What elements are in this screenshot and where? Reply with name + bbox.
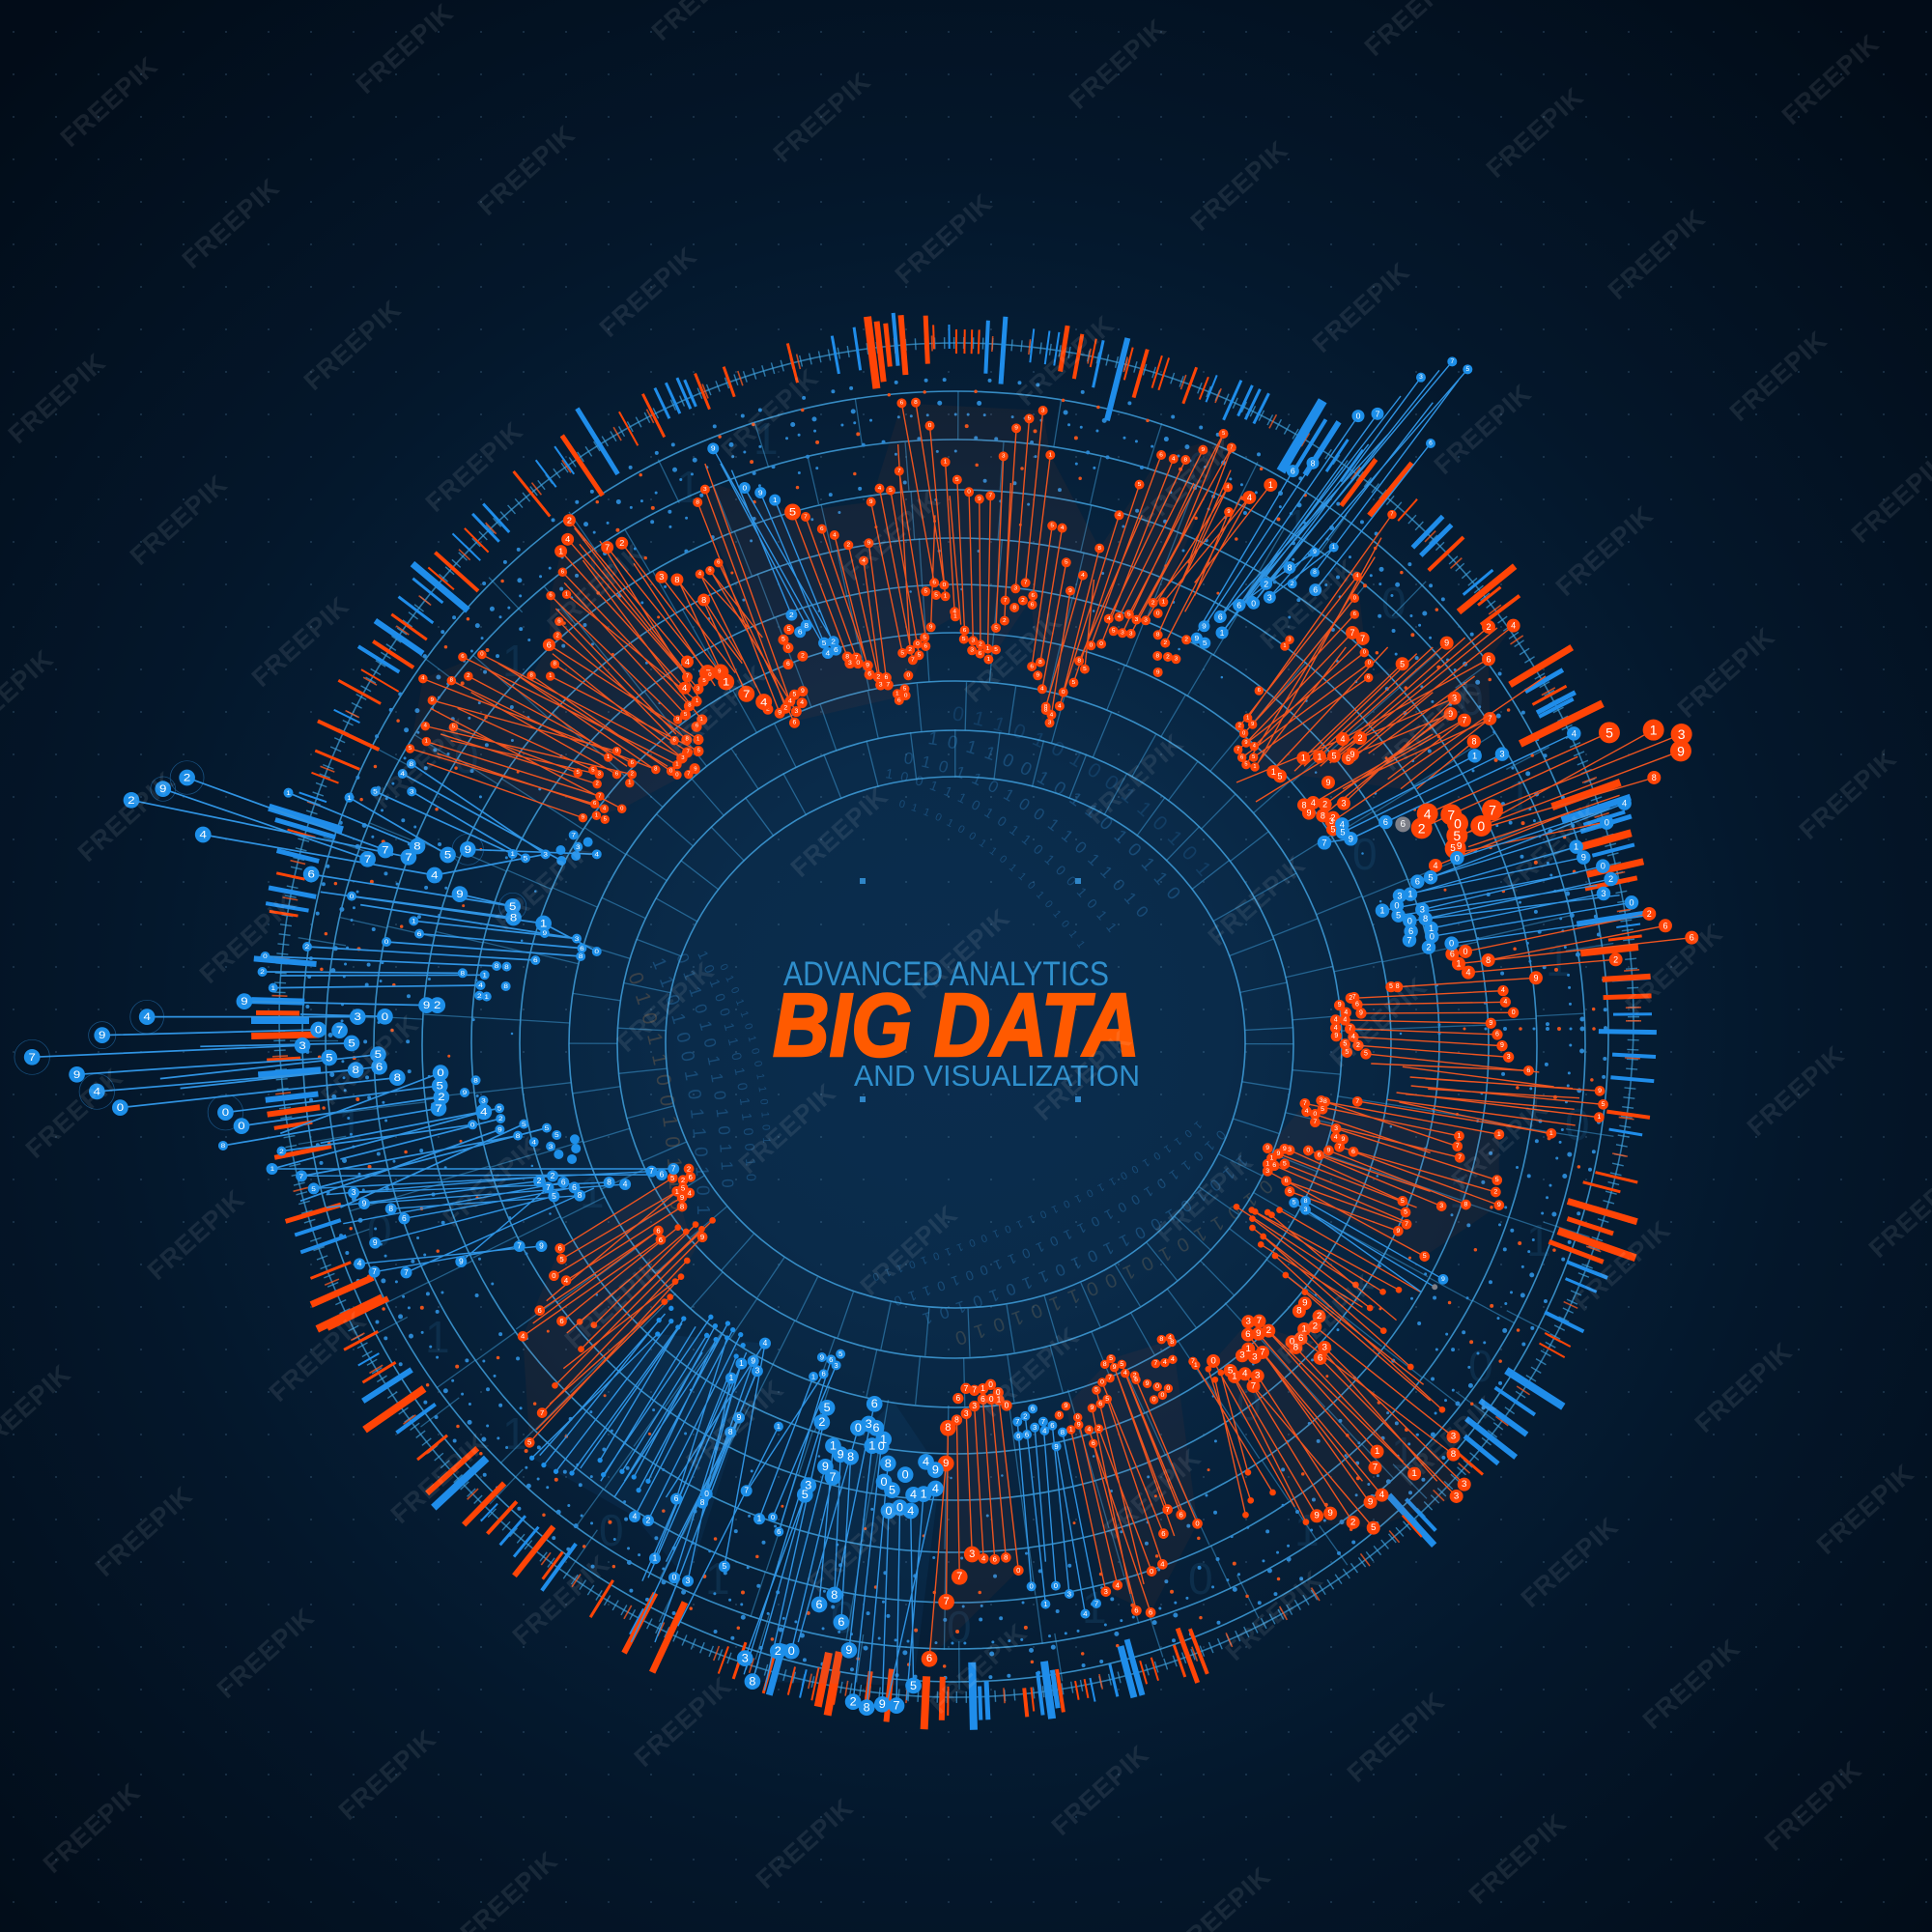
small node digits: 1153841533470931606082688028148121893520985855432175 bbox=[221, 760, 599, 1193]
small orange nodes bbox=[1224, 434, 1392, 767]
small blue digits: 75361982 bbox=[1291, 358, 1469, 587]
large node digits: 272381468447 bbox=[547, 516, 711, 693]
watermark: FREEPIK bbox=[125, 469, 233, 571]
watermark: FREEPIK bbox=[733, 1078, 841, 1179]
grey node bbox=[1395, 816, 1410, 832]
watermark: FREEPIK bbox=[1794, 744, 1902, 845]
tunnel of binary digits: 1 0 0 1 1 1 0 1 0 1 1 0 1 0 0 1 0 1 1 0 1 0 1 0 bbox=[886, 769, 1116, 933]
watermark: FREEPIK bbox=[1255, 554, 1363, 655]
outer ring ticks: blue bbox=[251, 313, 1657, 1730]
watermark: FREEPIK bbox=[142, 1184, 250, 1286]
orange cluster digits: 7710066013380 bbox=[954, 1380, 1009, 1424]
panel: top sector bbox=[678, 399, 1255, 772]
large node digits: 2924778759469581992430907735556894080527400 bbox=[28, 772, 548, 1132]
outer ring ticks: orange bbox=[251, 315, 1652, 1729]
watermark: FREEPIK bbox=[1029, 1025, 1137, 1126]
radial grid spokes bbox=[314, 415, 1597, 1665]
watermark: FREEPIK bbox=[1272, 1268, 1380, 1370]
watermark: FREEPIK bbox=[1603, 204, 1711, 305]
watermark: FREEPIK bbox=[438, 1131, 546, 1233]
orange small nodes bbox=[1059, 1338, 1196, 1443]
watermark: FREEPIK bbox=[542, 538, 650, 639]
large orange nodes bbox=[708, 512, 793, 702]
small text on stacked node: 59 bbox=[1450, 841, 1463, 854]
watermark: FREEPIK bbox=[1776, 29, 1885, 130]
watermark: FREEPIK bbox=[264, 1306, 372, 1407]
watermark: FREEPIK bbox=[1064, 14, 1172, 115]
watermark: FREEPIK bbox=[1550, 500, 1659, 602]
tunnel of binary digits: 0 1 0 1 1 0 1 0 0 1 1 0 1 0 1 bbox=[721, 964, 771, 1143]
watermark: FREEPIK bbox=[90, 1481, 198, 1582]
node digits: 6614666288106482945157309581591668175318007991626535217640915 bbox=[409, 560, 721, 822]
panel: left sector bbox=[14, 760, 599, 1208]
watermark: FREEPIK bbox=[1377, 675, 1485, 777]
blue digits: 79767482267658977496893571419319870861542103 bbox=[270, 1165, 768, 1585]
tunnel of binary digits: 1 1 0 1 0 1 0 0 1 1 0 1 0 1 1 0 1 0 1 0 1 bbox=[922, 1155, 1247, 1323]
wedge shading bbox=[929, 1384, 1018, 1659]
small orange dots bbox=[1193, 1207, 1442, 1522]
orange connector lines bbox=[523, 1178, 713, 1442]
blue wedge shading bbox=[532, 1334, 765, 1581]
watermark: FREEPIK bbox=[611, 956, 720, 1058]
small orange dots bbox=[554, 1220, 713, 1385]
orange nodes bbox=[697, 403, 1249, 591]
large orange nodes bbox=[929, 1428, 972, 1659]
watermark: FREEPIK bbox=[3, 348, 111, 449]
watermark: FREEPIK bbox=[1151, 1147, 1259, 1248]
watermark: FREEPIK bbox=[559, 1253, 668, 1354]
faint large digits in outer bands: 010110100110101101001011010110 bbox=[338, 413, 1590, 1652]
watermark: FREEPIK bbox=[385, 1428, 494, 1529]
outer orange nodes bbox=[983, 1510, 1198, 1612]
wedge shading bbox=[1267, 1103, 1499, 1257]
watermark: FREEPIK bbox=[1498, 797, 1606, 898]
title: and visualization: AND VISUALIZATION bbox=[854, 1059, 1140, 1093]
blue nodes bbox=[272, 1169, 765, 1581]
connector lines bbox=[1193, 1064, 1604, 1528]
tunnel of binary digits: 1 0 1 1 0 1 0 0 1 1 0 1 0 1 0 1 1 0 1 0 0 1 1 0 1 0 1 1 0 1 bbox=[873, 1121, 1202, 1281]
watermark: FREEPIK bbox=[907, 903, 1015, 1005]
medium orange digits: 84266068142984211569519894238235 bbox=[1271, 733, 1694, 982]
large orange nodes bbox=[1422, 730, 1682, 848]
watermark: FREEPIK bbox=[298, 295, 407, 396]
outer orange digits: 46803466046760 bbox=[981, 1505, 1200, 1617]
connector lines bbox=[411, 521, 762, 818]
panel: lower-left sector bbox=[270, 1165, 768, 1642]
watermark: FREEPIK bbox=[351, 0, 459, 99]
watermark: FREEPIK bbox=[1324, 972, 1433, 1073]
watermark: FREEPIK bbox=[1342, 1687, 1450, 1788]
orange connector lines bbox=[1236, 676, 1691, 1072]
watermark: FREEPIK bbox=[681, 1375, 789, 1476]
watermark: FREEPIK bbox=[1081, 728, 1189, 830]
blue connector lines bbox=[32, 764, 597, 1208]
watermark: FREEPIK bbox=[246, 591, 355, 693]
orange small digits: 5895426075596900009009142684874471 bbox=[1057, 1335, 1198, 1447]
blue nodes bbox=[1324, 733, 1632, 948]
watermark: FREEPIK bbox=[977, 1321, 1085, 1423]
orange cluster nodes bbox=[956, 1384, 1007, 1420]
watermark: FREEPIK bbox=[803, 1496, 911, 1598]
watermark: FREEPIK bbox=[785, 781, 894, 883]
watermark: FREEPIK bbox=[959, 607, 1067, 708]
tunnel of binary digits: 0 1 1 0 1 0 0 1 1 0 1 1 0 1 0 1 0 1 1 0 0 1 0 1 1 bbox=[899, 800, 1084, 949]
watermark: FREEPIK bbox=[1394, 1390, 1502, 1492]
grey node digit: 6 bbox=[1401, 819, 1406, 830]
watermark: FREEPIK bbox=[194, 888, 302, 989]
blue digits: 8539 bbox=[1293, 1198, 1445, 1283]
watermark: FREEPIK bbox=[768, 67, 876, 168]
watermark: FREEPIK bbox=[1742, 1040, 1850, 1142]
watermark: FREEPIK bbox=[1516, 1512, 1624, 1613]
watermark: FREEPIK bbox=[751, 1793, 859, 1894]
inner node digits: 60551419506257505106653236115527837266689488434058500445335332108282392 bbox=[895, 580, 1189, 726]
tunnel of binary digits: 1 1 0 1 0 0 1 0 1 1 0 1 0 1 bbox=[653, 958, 710, 1214]
large blue nodes bbox=[32, 778, 544, 1126]
large orange digits: 41775924639778 bbox=[1247, 480, 1516, 747]
scattered data dots bbox=[307, 380, 1605, 1678]
blue connector lines bbox=[713, 448, 836, 653]
watermark: FREEPIK bbox=[890, 188, 998, 290]
watermark: FREEPIK bbox=[333, 1724, 441, 1826]
watermark: FREEPIK bbox=[472, 120, 581, 221]
tunnel of binary digits: 0 1 0 1 1 0 1 0 0 1 1 0 1 1 0 1 0 1 0 1 bbox=[904, 752, 1148, 917]
watermark: FREEPIK bbox=[368, 713, 476, 814]
title block bbox=[773, 955, 1140, 1093]
blue connector lines bbox=[1294, 1201, 1443, 1292]
watermark: FREEPIK bbox=[20, 1063, 128, 1164]
node digits: 680715097395314599424673854549845648957494 bbox=[696, 399, 1252, 594]
blue connector lines bbox=[1198, 361, 1467, 633]
large blue nodes bbox=[745, 1404, 935, 1708]
watermark: FREEPIK bbox=[1672, 622, 1780, 724]
watermark: FREEPIK bbox=[924, 1618, 1033, 1719]
watermark: FREEPIK bbox=[55, 51, 163, 153]
watermark: FREEPIK bbox=[1811, 1459, 1919, 1560]
watermark: FREEPIK bbox=[716, 363, 824, 465]
watermark: FREEPIK bbox=[1203, 850, 1311, 952]
small orange digits: 5749740600663112909476551 bbox=[1222, 431, 1394, 770]
large orange nodes bbox=[1249, 485, 1514, 742]
small blue digits: 7263764866900137496531641911981708106535 bbox=[676, 1339, 1098, 1618]
panel: lower-right sector bbox=[1193, 1064, 1605, 1533]
watermark: FREEPIK bbox=[72, 766, 181, 867]
small blue dots bbox=[532, 1308, 743, 1491]
accent squares bbox=[860, 878, 1081, 1102]
lower orange digits: 5827440694944964794952355 bbox=[1334, 983, 1516, 1061]
watermark: FREEPIK bbox=[1133, 432, 1241, 533]
blue connector lines bbox=[1324, 733, 1642, 944]
watermark: FREEPIK bbox=[1724, 326, 1833, 427]
panel: upper-left sector bbox=[409, 516, 762, 822]
watermark: FREEPIK bbox=[1046, 1740, 1154, 1841]
watermark: FREEPIK bbox=[838, 485, 946, 586]
orange digits: 650464675252615498669 bbox=[521, 1165, 704, 1447]
large node digits: 574791 bbox=[704, 505, 796, 708]
watermark: FREEPIK bbox=[1220, 1565, 1328, 1666]
wedge shading right bbox=[1065, 1340, 1198, 1612]
orange connector lines bbox=[929, 1359, 1198, 1659]
title: big data: BIG DATA bbox=[773, 975, 1140, 1075]
left orange nodes bbox=[682, 630, 888, 769]
small blue nodes bbox=[678, 1344, 1096, 1614]
tunnel of binary digits: 0 1 0 1 1 0 1 0 0 1 0 1 1 0 1 0 1 1 0 0 1 0 1 1 0 1 bbox=[895, 1130, 1225, 1306]
blue connector lines bbox=[642, 1344, 1096, 1708]
grey dot bbox=[1432, 1284, 1437, 1290]
watermark: FREEPIK bbox=[1185, 135, 1293, 237]
watermark: FREEPIK bbox=[1098, 1443, 1207, 1545]
watermark: FREEPIK bbox=[177, 173, 285, 274]
wedge shading bbox=[411, 521, 695, 818]
blue digits: 413645970401902305613105380610720 bbox=[1321, 728, 1634, 952]
cluster digits: 98212376920683617330514373833117499925 bbox=[1210, 1298, 1466, 1533]
wedge shading bbox=[698, 403, 1231, 722]
panel: bottom sector bbox=[642, 1335, 1200, 1714]
lower orange nodes bbox=[1336, 987, 1514, 1057]
watermark: FREEPIK bbox=[1620, 919, 1728, 1020]
concentric rings bbox=[279, 343, 1634, 1697]
large blue digits: 63601981018049059735414004520283686928975 bbox=[742, 1398, 939, 1714]
watermark: FREEPIK bbox=[1637, 1634, 1746, 1735]
tunnel of binary digits: 0 1 1 0 1 0 1 0 0 1 1 0 1 0 1 bbox=[953, 707, 1209, 877]
wedge shading lower bbox=[1213, 1321, 1464, 1528]
node digits: 6951173874507349760699939165316617715298355795 bbox=[1265, 1067, 1605, 1260]
blue connector lines bbox=[272, 1169, 765, 1642]
watermark: FREEPIK bbox=[490, 835, 598, 936]
blue nodes bbox=[1220, 413, 1378, 633]
inner orange nodes bbox=[897, 582, 1186, 723]
watermark: FREEPIK bbox=[38, 1777, 146, 1879]
medium orange nodes bbox=[1273, 738, 1691, 978]
connector lines bbox=[1179, 434, 1514, 789]
halos around large nodes bbox=[14, 761, 526, 1130]
watermark: FREEPIK bbox=[1446, 1094, 1554, 1195]
orange nodes bbox=[1267, 1070, 1604, 1257]
blue wedge shading bbox=[753, 1401, 941, 1686]
large orange digits: 51397070542 bbox=[1418, 723, 1686, 843]
watermark: FREEPIK bbox=[1568, 1215, 1676, 1317]
tunnel of binary digits: 0 1 0 1 1 0 1 0 1 0 0 1 1 0 1 0 1 0 bbox=[956, 1180, 1272, 1345]
small blue nodes bbox=[1293, 361, 1467, 583]
watermark: FREEPIK bbox=[212, 1603, 320, 1704]
blue node digits: 286524690916069195 bbox=[711, 444, 1255, 657]
panel: upper-right sector bbox=[1179, 358, 1516, 789]
title: advanced analytics: ADVANCED ANALYTICS bbox=[783, 955, 1109, 993]
large orange nodes bbox=[549, 521, 708, 688]
watermark: FREEPIK bbox=[1011, 310, 1120, 412]
tunnel of binary digits: 1 0 1 0 0 1 1 0 1 0 1 1 0 0 1 0 1 0 bbox=[697, 952, 756, 1180]
orange nodes bbox=[411, 563, 720, 819]
panel: right sector bbox=[1236, 676, 1694, 1072]
tunnel of binary digits bbox=[630, 707, 1272, 1345]
orange nodes bbox=[523, 1169, 702, 1442]
blue nodes bbox=[713, 448, 1252, 653]
watermark: FREEPIK bbox=[1759, 1755, 1867, 1857]
watermark: FREEPIK bbox=[664, 660, 772, 761]
left node digits: 8730962637292459436620554743516515817539 bbox=[680, 626, 891, 772]
blue nodes bbox=[1294, 1201, 1443, 1279]
watermark: FREEPIK bbox=[1307, 257, 1415, 358]
large orange digits: 893776 bbox=[926, 1422, 975, 1664]
watermark: FREEPIK bbox=[1463, 1808, 1572, 1910]
watermark: FREEPIK bbox=[855, 1200, 963, 1301]
watermark: FREEPIK bbox=[420, 416, 528, 518]
blue node digits: 078682630661 bbox=[1218, 409, 1380, 638]
wedge shading bbox=[1249, 515, 1514, 789]
watermark: FREEPIK bbox=[316, 1009, 424, 1111]
watermark: FREEPIK bbox=[1690, 1337, 1798, 1438]
small blue nodes bbox=[223, 764, 597, 1189]
orange cluster nodes bbox=[1213, 1303, 1464, 1528]
wedge shading bbox=[523, 1178, 713, 1442]
connector lines bbox=[678, 403, 1249, 723]
watermark: FREEPIK bbox=[1429, 379, 1537, 480]
tunnel of binary digits: 0 1 0 1 1 0 0 1 0 1 1 0 bbox=[630, 973, 682, 1209]
watermark: FREEPIK bbox=[594, 242, 702, 343]
tunnel of binary digits: 0 1 1 0 1 0 1 1 0 1 0 1 1 0 1 bbox=[677, 953, 734, 1187]
tunnel of binary digits: 1 0 1 1 0 0 1 0 1 1 0 1 0 1 1 0 0 1 bbox=[929, 732, 1180, 898]
watermark: FREEPIK bbox=[1481, 82, 1589, 184]
watermark: FREEPIK bbox=[629, 1671, 737, 1773]
watermark: FREEPIK bbox=[507, 1549, 615, 1651]
